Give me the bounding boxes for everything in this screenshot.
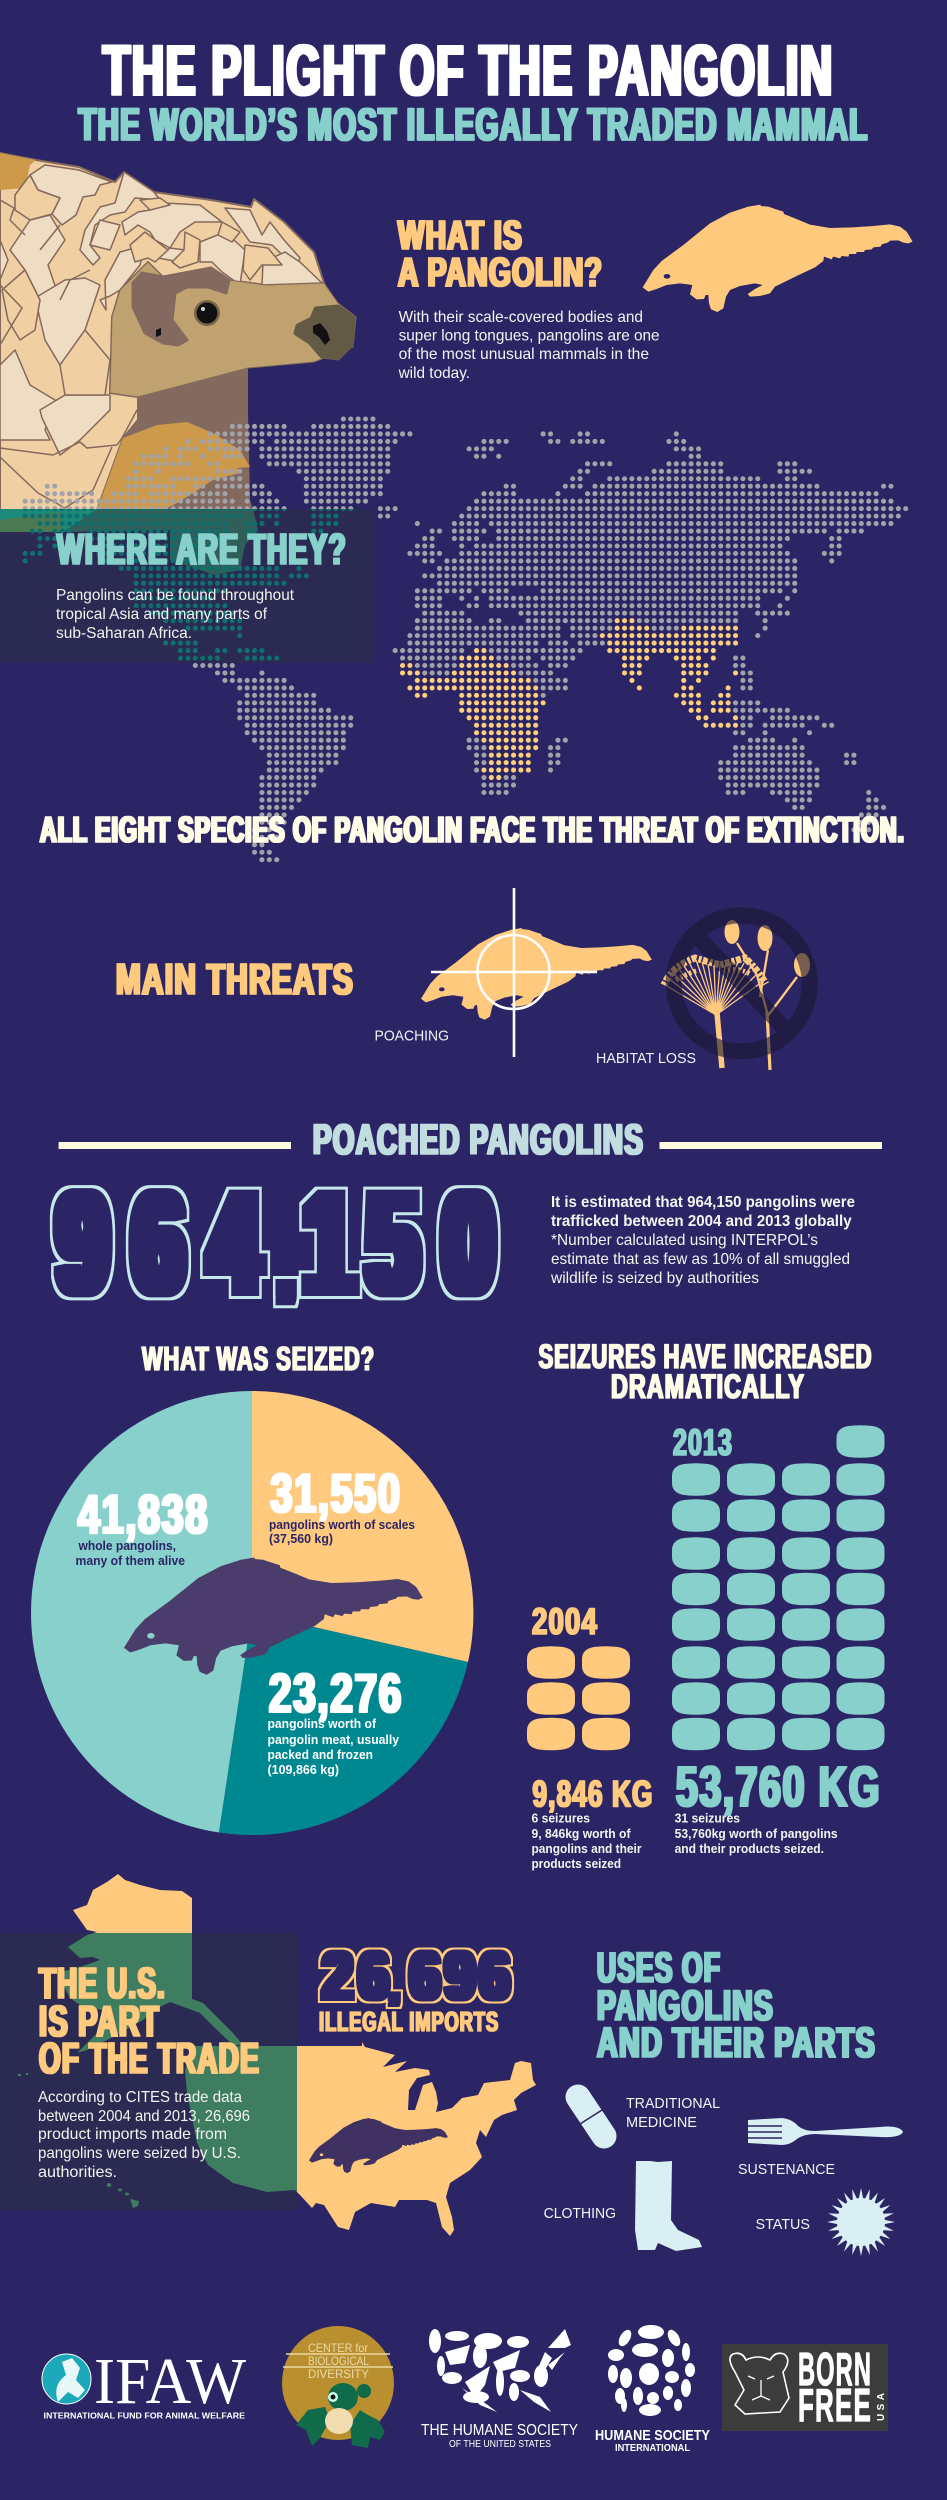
land seen through panel	[0, 509, 354, 661]
logo: Center for Biological Diversity: BIOLOGICAL	[308, 2354, 369, 2368]
heading: main threats: MAIN THREATS	[116, 955, 354, 1004]
text: CITES data: product imports made from	[38, 2126, 227, 2143]
heading: poached pangolins with rules	[59, 1116, 882, 1164]
icon: starburst	[826, 2187, 896, 2257]
heading: uses of pangolins: PANGOLINS	[597, 1982, 774, 2030]
stat: 53,760 kg	[675, 1755, 881, 1856]
stat: 9,846 kg: pangolins and their	[532, 1841, 642, 1856]
pie chart: what was seized	[31, 1391, 473, 1835]
heading: seizures have increased: DRAMATICALLY	[611, 1368, 805, 1406]
label: traditional medicine	[626, 2096, 720, 2131]
text: what is a pangolin: With their scale-covered bodies and	[399, 309, 643, 326]
map: united states	[57, 1874, 536, 2236]
text: where are they: tropical Asia and many parts of	[56, 606, 268, 623]
heading: what is a pangolin: A PANGOLIN?	[398, 249, 603, 295]
logo: Born Free USA: BORN	[798, 2343, 872, 2395]
heading: what is a pangolin: WHAT IS	[398, 212, 523, 258]
label: traditional medicine: MEDICINE	[626, 2115, 697, 2131]
logo: Humane Society International: HUMANE SOCIETY	[595, 2427, 710, 2444]
text: trafficking estimate: *Number calculated using INTERPOL’s	[551, 1232, 818, 1249]
heading: where are they: WHERE ARE THEY?	[57, 525, 347, 574]
text: CITES data	[38, 2089, 250, 2181]
stat: 9,846 kg	[532, 1774, 654, 1871]
logo: IFAW: IFAW	[94, 2345, 247, 2418]
icon: pill	[578, 2097, 604, 2136]
slice label: whole: whole pangolins,	[78, 1538, 176, 1553]
chart: 2013 seizures	[672, 1422, 884, 1750]
text: CITES data: authorities.	[38, 2164, 117, 2181]
slice label: meat: (109,866 kg)	[268, 1762, 339, 1777]
label: sustenance: SUSTENANCE	[738, 2162, 835, 2178]
label: status: STATUS	[756, 2217, 810, 2233]
label: traditional medicine: TRADITIONAL	[626, 2096, 720, 2112]
panel: where are they	[0, 509, 373, 663]
text: trafficking estimate: wildlife is seized by authorities	[550, 1270, 759, 1287]
icon: pangolin on US map	[309, 2118, 448, 2173]
illustration: pangolin head	[0, 153, 356, 513]
slice label: whole: many of them alive	[76, 1553, 185, 1568]
stat: 26,696 illegal imports: ILLEGAL IMPORTS	[319, 2006, 499, 2037]
slice label: meat	[268, 1662, 403, 1777]
logo: Born Free USA	[722, 2343, 888, 2431]
slice label: scales: pangolins worth of scales	[269, 1517, 415, 1532]
text: CITES data: pangolins were seized by U.S.	[38, 2145, 241, 2162]
logo: Humane Society of the United States	[421, 2329, 578, 2450]
slice label: meat: pangolin meat, usually	[268, 1732, 400, 1747]
logo: Humane Society International: INTERNATIONAL	[615, 2442, 691, 2454]
stat: 964,150 outlined: 964 ,150	[57, 1163, 494, 1323]
icon: boot	[635, 2161, 702, 2251]
pie pangolin	[124, 1558, 423, 1675]
icon: pangolin silhouette	[643, 205, 913, 312]
stat: 53,760 kg: 53,760kg worth of pangolins	[675, 1826, 838, 1841]
heading: U.S. trade: OF THE TRADE	[39, 2034, 260, 2083]
text: trafficking estimate	[550, 1194, 855, 1287]
slice label: meat: 23,276	[269, 1662, 403, 1724]
text: what is a pangolin: wild today.	[398, 365, 470, 382]
text: what is a pangolin: super long tongues, pangolins are one	[399, 328, 660, 344]
logo: Humane Society International	[595, 2325, 710, 2454]
label: habitat loss: HABITAT LOSS	[596, 1051, 696, 1067]
chart: 2004 seizures: 2004	[532, 1601, 598, 1642]
logo: IFAW: INTERNATIONAL FUND FOR ANIMAL WELFARE	[44, 2411, 245, 2421]
slice label: meat: pangolins worth of	[268, 1716, 377, 1731]
text: what is a pangolin: of the most unusual mammals in the	[399, 346, 649, 363]
slice label: scales: (37,560 kg)	[269, 1531, 333, 1546]
text: where are they	[56, 587, 295, 642]
text: trafficking estimate: trafficked between 2004 and 2013 globally	[551, 1213, 852, 1230]
heading: what was seized: WHAT WAS SEIZED?	[142, 1341, 375, 1378]
label: poaching: POACHING	[374, 1029, 449, 1045]
icon: fork	[748, 2118, 903, 2145]
text: CITES data: between 2004 and 2013, 26,696	[38, 2108, 250, 2125]
land seen through panel	[18, 1933, 297, 2208]
slice label: meat: packed and frozen	[268, 1747, 373, 1762]
heading: U.S. trade: IS PART	[39, 1997, 160, 2046]
heading: seizures have increased	[538, 1338, 872, 1406]
stat: 53,760 kg: and their products seized.	[675, 1841, 824, 1856]
heading: poached pangolins with rules: POACHED PANGOLINS	[313, 1116, 644, 1164]
logo: Center for Biological Diversity: DIVERSITY	[308, 2367, 369, 2381]
stat: 9,846 kg: 6 seizures	[532, 1810, 590, 1826]
stat: 26,696 illegal imports: 26,696	[322, 1938, 510, 2013]
slice label: whole	[76, 1483, 209, 1568]
text: trafficking estimate: estimate that as few as 10% of all smuggled	[551, 1251, 850, 1268]
stat: 9,846 kg: 9,846 KG	[532, 1774, 654, 1814]
logo: Born Free USA: FREE	[798, 2379, 872, 2431]
heading: U.S. trade	[39, 1959, 260, 2083]
text: what is a pangolin	[398, 309, 660, 382]
heading: uses of pangolins	[597, 1944, 876, 2067]
icon: poaching crosshair	[421, 888, 652, 1057]
text: CITES data: According to CITES trade data	[38, 2089, 242, 2106]
stat: 53,760 kg: 31 seizures	[675, 1810, 740, 1826]
text: where are they: sub-Saharan Africa.	[56, 625, 192, 642]
logo: Born Free USA: USA	[876, 2393, 887, 2421]
text: trafficking estimate: It is estimated that 964,150 pangolins were	[551, 1194, 855, 1211]
logo: Humane Society of the United States: OF THE UNITED STATES	[449, 2438, 551, 2450]
logo: Humane Society of the United States: THE HUMANE SOCIETY	[421, 2422, 578, 2439]
slice label: scales	[269, 1462, 415, 1546]
logo: Center for Biological Diversity: CENTER for	[308, 2341, 368, 2355]
chart: 2013 seizures: 2013	[673, 1422, 733, 1463]
heading: U.S. trade: THE U.S.	[39, 1959, 166, 2008]
heading: what is a pangolin	[398, 212, 603, 295]
chart: 2004 seizures	[527, 1601, 630, 1750]
heading: uses of pangolins: USES OF	[597, 1944, 721, 1992]
world dot map	[25, 419, 906, 860]
stat: 9,846 kg: products seized	[532, 1856, 621, 1871]
panel: the U.S. is part of the trade	[0, 1933, 297, 2210]
stat: 9,846 kg: 9, 846kg worth of	[532, 1826, 631, 1841]
text: where are they: Pangolins can be found throughout	[56, 587, 295, 604]
icon: habitat loss	[664, 915, 810, 1070]
label: clothing: CLOTHING	[544, 2206, 616, 2222]
slice label: whole: 41,838	[78, 1483, 209, 1545]
slice label: scales: 31,550	[270, 1462, 402, 1524]
logo: Center for Biological Diversity	[282, 2326, 394, 2448]
